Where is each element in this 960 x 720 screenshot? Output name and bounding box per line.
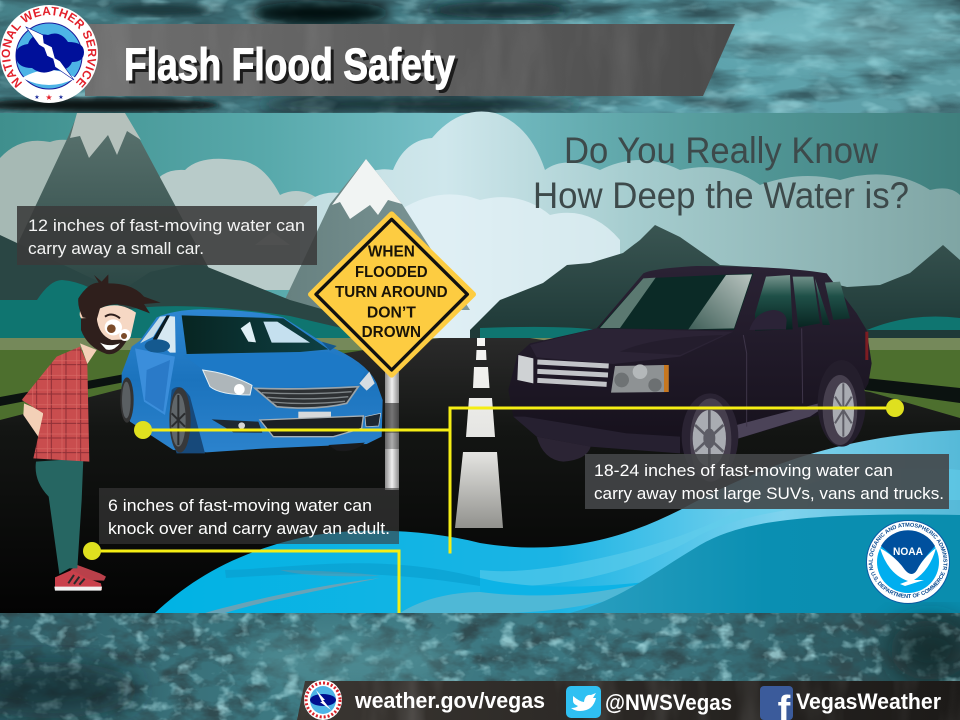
sign text [335, 244, 448, 341]
warning sign [311, 214, 473, 375]
website: weather.gov/vegas [354, 688, 545, 713]
callout: 12 inches [17, 206, 317, 265]
illustrated scene [0, 112, 960, 613]
man head [78, 274, 161, 354]
icon: twitter [566, 686, 601, 718]
black SUV [508, 266, 872, 482]
man neck [80, 343, 97, 364]
dark mid mountains [0, 235, 360, 345]
SUV mirror [749, 310, 787, 330]
SUV rear wheel [818, 360, 866, 447]
SUV bumper [513, 417, 680, 453]
SUV headlights [517, 355, 533, 383]
NWS logo [0, 5, 98, 103]
car wheels [120, 377, 365, 453]
road [0, 338, 960, 613]
SUV hood [530, 328, 733, 364]
callout: 6 inches: 6 inches of fast-moving water can [108, 497, 372, 515]
footer bar [297, 680, 960, 720]
man shirt [22, 347, 89, 462]
NWS logo: ★ [34, 94, 40, 101]
twitter handle: @NWSVegas [605, 690, 732, 715]
SUV front wheel [682, 393, 738, 482]
logo ring text: NATIONAL WEATHER SERVICE [2, 6, 96, 88]
callout: 6 inches: knock over and carry away an adult. [108, 520, 390, 538]
sign text: FLOODED [355, 264, 428, 281]
bottom water texture band [0, 613, 960, 720]
sign text: WHEN [368, 244, 415, 261]
man arm skin [23, 403, 43, 442]
facebook handle: VegasWeather [796, 689, 941, 714]
leader line: adult depth [83, 542, 399, 613]
mountain centre with snow [255, 159, 470, 310]
headline: Do You Really Know [564, 130, 878, 171]
sign text: DROWN [362, 324, 421, 341]
SUV windscreen [598, 273, 753, 330]
NOAA logo: NATIONAL OCEANIC AND ATMOSPHERIC ADMINISTRATION [868, 522, 948, 570]
man trousers [36, 458, 83, 574]
water: teal foreground [570, 514, 960, 613]
headline [533, 130, 909, 216]
man shoes [54, 565, 106, 591]
car doors [135, 348, 175, 415]
title: Flash Flood Safety [124, 39, 455, 90]
blue car [120, 309, 383, 453]
sign text: DON’T [367, 304, 416, 321]
footer NWS logo [304, 680, 342, 720]
SUV side panels [733, 402, 830, 440]
car grille [255, 387, 358, 408]
far right mountains [470, 225, 960, 345]
teal hills [0, 280, 960, 345]
sky [0, 113, 960, 353]
clouds [0, 111, 960, 340]
man with beard [22, 274, 161, 591]
callout: 12 inches: carry away a small car. [28, 240, 204, 258]
sign post [385, 372, 399, 490]
callout: 18-24 inches: carry away most large SUVs, vans and trucks. [594, 485, 944, 503]
car headlights [203, 370, 252, 395]
NOAA logo: NOAA [893, 546, 923, 558]
SUV grille [537, 362, 609, 384]
SUV side windows [755, 275, 793, 331]
leader line: SUV and car depth [134, 399, 904, 554]
icon: facebook [760, 686, 793, 720]
NOAA logo [866, 520, 950, 604]
logo cloud [16, 34, 84, 73]
NWS logo: ★ [45, 93, 53, 102]
callout: 6 inches [99, 488, 399, 544]
water: main wave [155, 430, 960, 613]
top water texture band [0, 0, 960, 113]
headline: How Deep the Water is? [533, 175, 909, 216]
callout: 18-24 inches [585, 454, 949, 509]
NWS logo: ★ [58, 94, 64, 101]
grass [0, 338, 960, 428]
mountain far left [0, 113, 250, 345]
title: Flash Flood Safety [127, 42, 458, 93]
logo lightning [26, 27, 74, 80]
header banner [85, 24, 735, 96]
NOAA logo: U.S. DEPARTMENT OF COMMERCE [871, 572, 945, 598]
callout: 18-24 inches: 18-24 inches of fast-moving water can [594, 462, 893, 480]
callout: 12 inches: 12 inches of fast-moving water can [28, 217, 305, 235]
sign text: TURN AROUND [335, 284, 448, 301]
road centre dashes [455, 338, 503, 528]
